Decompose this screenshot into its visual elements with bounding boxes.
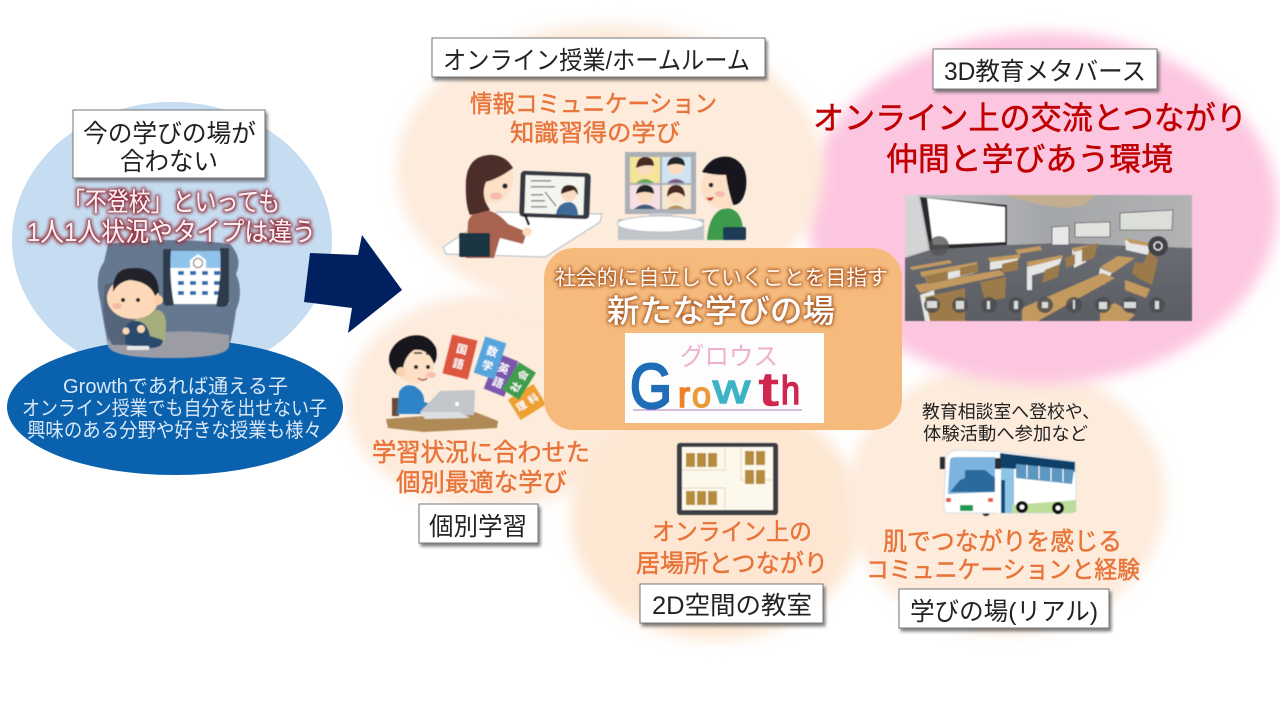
panel: 2D classroom [636, 443, 828, 623]
heading: online place and connection [636, 519, 828, 578]
dark blue ellipse with description [7, 339, 343, 475]
logo: Growth: G [630, 352, 672, 422]
card: Japanese: 国 [455, 342, 469, 357]
arrow [304, 235, 402, 333]
card: math [474, 337, 506, 379]
heading: optimal individual learning: 個別最適な学び [396, 469, 567, 497]
label: 2D classroom: 2D空間の教室 [652, 592, 812, 620]
heading: optimal individual learning [372, 439, 590, 497]
heading: online exchange and connection: オンライン上の交流とつながり [813, 100, 1247, 136]
card: English: 語 [490, 375, 505, 391]
heading: online place and connection: オンライン上の [652, 519, 812, 546]
glowing headline: every child differs: 1人1人状況やタイプは違う [27, 217, 316, 247]
heading: information and communication: 知識習得の学び [510, 120, 680, 147]
card: science [508, 384, 546, 420]
panel: online classes [432, 38, 765, 258]
heading: optimal individual learning: 学習状況に合わせた [372, 439, 590, 467]
illustration: tablet with virtual rooms [677, 443, 778, 515]
background blob: online classes [396, 24, 824, 316]
logo: Growth: r [678, 374, 690, 415]
card: Japanese: 語 [451, 357, 465, 372]
illustration: boy in a video call [618, 152, 746, 240]
label: 3D education metaverse [933, 49, 1157, 89]
label: 2D classroom [640, 584, 823, 623]
description text: Growthであれば通える子 [63, 375, 288, 398]
caption: aiming for independence: 社会的に自立していくことを目指す [555, 267, 888, 290]
panel: 3D metaverse [813, 49, 1247, 321]
label: real-world place to learn: 学びの場(リアル) [910, 598, 1098, 626]
illustration: bus [940, 450, 1076, 516]
panel: center Growth card [544, 248, 902, 430]
label: online classes and homeroom [432, 38, 765, 77]
panel: real-world learning [866, 402, 1140, 628]
label: 3D education metaverse: 3D教育メタバース [944, 58, 1146, 86]
note: attending counselling room and activities: 体験活動へ参加など [923, 424, 1088, 444]
heading: online exchange and connection: 仲間と学びあう環境 [886, 141, 1173, 177]
card: social studies: 社 [508, 380, 524, 395]
card: math: 数 [485, 343, 500, 360]
label: real-world place to learn [899, 589, 1109, 628]
glowing headline: every child differs: 「不登校」といっても [63, 187, 280, 217]
heading: information and communication: 情報コミュニケーション [470, 91, 717, 118]
heading: feeling connection in person [866, 528, 1140, 584]
image: 3D virtual classroom [905, 195, 1192, 321]
card: science: 科 [526, 391, 541, 407]
label: individual study [419, 504, 538, 543]
label: current place does not fit: 今の学びの場が [83, 120, 256, 148]
note: attending counselling room and activities: 教育相談室へ登校や、 [922, 402, 1100, 422]
card: social studies [502, 362, 536, 400]
heading: feeling connection in person: コミュニケーションと経験 [866, 557, 1140, 584]
description text: オンライン授業でも自分を出せない子 [22, 397, 327, 420]
background blob: 2D classroom [570, 396, 862, 640]
background blob: individual learning [347, 294, 633, 510]
heading: online exchange and connection [813, 100, 1247, 177]
card: English [484, 353, 518, 397]
card: math: 学 [480, 357, 495, 374]
logo: Growth: o [692, 374, 711, 415]
heading: a new place to learn: 新たな学びの場 [607, 293, 835, 329]
heading: information and communication [470, 91, 717, 147]
panel: individual learning [372, 334, 590, 543]
heading: online place and connection: 居場所とつながり [636, 550, 828, 578]
heading: feeling connection in person: 肌でつながりを感じる [883, 528, 1122, 556]
logo: Growth: w [712, 365, 751, 412]
description text [22, 375, 327, 442]
light blue circle [12, 102, 332, 378]
logo: Growth: h [781, 369, 800, 413]
illustration: boy with a laptop and subject cards [386, 334, 546, 432]
background blob: real-world learning [846, 362, 1166, 634]
label: online classes and homeroom: オンライン授業/ホームルーム [443, 47, 750, 75]
glowing headline: every child differs [27, 187, 316, 247]
illustration: girl studying with a tablet [443, 155, 602, 258]
card: Japanese [443, 334, 477, 380]
label: current place does not fit [73, 110, 265, 178]
card: social studies: 会 [515, 368, 531, 383]
label: current place does not fit: 合わない [120, 148, 218, 176]
card: English: 英 [496, 360, 511, 377]
logo: Growth: グロウス [680, 343, 778, 371]
note: attending counselling room and activities [922, 402, 1100, 444]
illustration: child sitting in a dark room [98, 240, 240, 358]
description text: 興味のある分野や好きな授業も様々 [27, 419, 322, 442]
card: science: 理 [514, 399, 529, 414]
orange rounded card [544, 248, 902, 430]
logo: Growth [625, 333, 824, 423]
background blob: 3D metaverse [806, 32, 1278, 384]
panel: current learning place does not fit [7, 102, 343, 475]
label: individual study: 個別学習 [429, 513, 527, 541]
logo: Growth: t [759, 363, 778, 415]
